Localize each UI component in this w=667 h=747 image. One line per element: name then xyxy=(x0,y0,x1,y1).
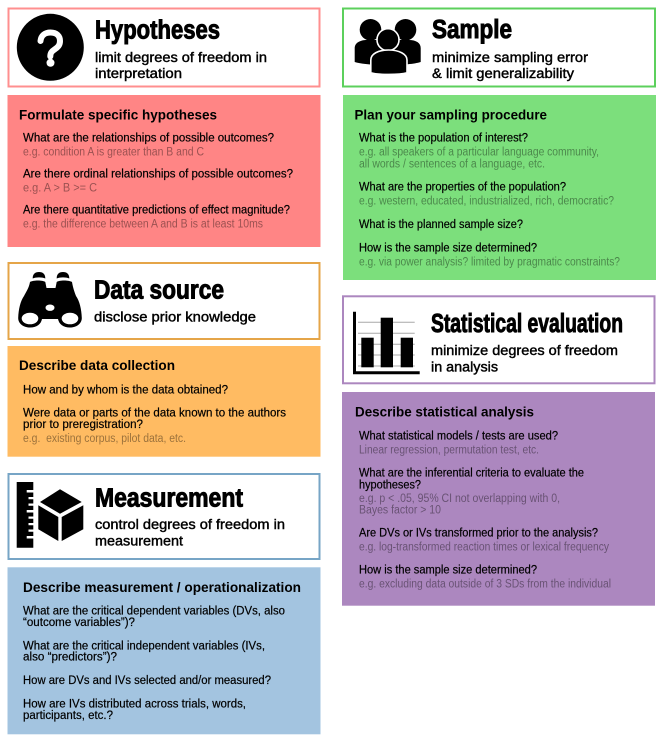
section: Measurement xyxy=(8,474,320,734)
heading: Hypotheses: Hypotheses xyxy=(95,16,220,44)
icon: question mark xyxy=(17,14,84,81)
item: relationships of outcomes: What are the relationships of possible outcomes? xyxy=(23,133,274,145)
subheading xyxy=(432,50,589,81)
section: Sample xyxy=(343,8,656,280)
heading: Data source: Data source xyxy=(94,276,224,304)
section: Hypotheses xyxy=(8,8,320,247)
item: inferential criteria: Bayes factor > 10 xyxy=(359,505,441,517)
item: dependent variables: “outcome variables”)? xyxy=(23,617,135,629)
item: properties of population: e.g. western, educated, industrialized, rich, democratic? xyxy=(359,196,614,208)
subheading xyxy=(431,343,618,375)
item: inferential criteria: hypotheses? xyxy=(359,479,421,491)
item: properties of population xyxy=(359,182,614,208)
item: distribution of IVs xyxy=(23,698,246,722)
header box: Sample xyxy=(343,8,655,86)
item: ordinal relationships: e.g. A > B >= C xyxy=(23,183,97,195)
item: population of interest: What is the population of interest? xyxy=(359,133,528,145)
panel heading: Describe measurement / operationalization xyxy=(23,579,301,595)
subheading: control degrees of freedom in xyxy=(95,517,285,532)
panel: Plan your sampling procedure xyxy=(343,95,656,280)
heading: Measurement: Measurement xyxy=(95,485,243,513)
item: planned sample size: What is the planned sample size? xyxy=(359,219,523,231)
item: distribution of IVs: How are IVs distributed across trials, words, xyxy=(23,698,246,710)
header box: Data source xyxy=(8,263,320,339)
item: known prior to preregistration: Were data or parts of the data known to the authors xyxy=(23,408,286,420)
item: inferential criteria xyxy=(359,468,584,517)
item: sample size determination xyxy=(359,243,620,269)
item: exclusions xyxy=(359,564,611,591)
section: Statistical evaluation xyxy=(342,296,655,606)
panel: Describe statistical analysis xyxy=(342,392,655,606)
panel: Describe data collection xyxy=(8,346,320,457)
subheading: in analysis xyxy=(431,360,498,375)
item: inferential criteria: e.g. p < .05, 95% CI not overlapping with 0, xyxy=(359,493,560,505)
item: transformations xyxy=(359,528,609,554)
item: population of interest xyxy=(359,133,599,170)
item: how and by whom: How and by whom is the data obtained? xyxy=(23,384,228,396)
subheading: minimize sampling error xyxy=(432,50,589,65)
panel heading: Plan your sampling procedure xyxy=(354,106,547,122)
item: exclusions: How is the sample size determined? xyxy=(359,564,537,576)
item: ordinal relationships xyxy=(23,169,293,195)
panel: Formulate specific hypotheses xyxy=(8,95,320,247)
heading: Sample: Sample xyxy=(432,16,512,44)
subheading: interpretation xyxy=(95,66,182,81)
panel heading: Describe statistical analysis xyxy=(355,404,534,420)
item: sample size determination: e.g. via power analysis? limited by pragmatic constraints? xyxy=(359,257,620,269)
icon: ruler and cube xyxy=(17,482,83,548)
item: population of interest: all words / sentences of a language, etc. xyxy=(359,158,545,170)
item: relationships of outcomes xyxy=(23,133,274,159)
item: dependent variables xyxy=(23,606,285,629)
item: models and tests: Linear regression, permutation test, etc. xyxy=(359,444,539,456)
item: quantitative predictions: Are there quantitative predictions of effect magnitude? xyxy=(23,205,290,217)
item: selection and measurement: How are DVs and IVs selected and/or measured? xyxy=(23,675,271,687)
subheading: disclose prior knowledge xyxy=(94,309,256,324)
subheading: & limit generalizability xyxy=(432,66,574,81)
subheading xyxy=(95,50,267,81)
panel heading: Formulate specific hypotheses xyxy=(19,106,217,122)
item: dependent variables: What are the critical dependent variables (DVs, also xyxy=(23,606,285,618)
item: independent variables: What are the critical independent variables (IVs, xyxy=(23,640,265,652)
panel heading: Describe data collection xyxy=(19,357,175,373)
item: quantitative predictions xyxy=(23,205,290,231)
header box: Hypotheses xyxy=(8,8,320,86)
item: inferential criteria: What are the inferential criteria to evaluate the xyxy=(359,468,584,480)
subheading: measurement xyxy=(95,534,183,549)
item: exclusions: e.g. excluding data outside of 3 SDs from the individual xyxy=(359,579,611,591)
icon: group of people xyxy=(355,19,421,74)
item: transformations: Are DVs or IVs transformed prior to the analysis? xyxy=(359,528,598,540)
panel: Describe measurement / operationalization xyxy=(8,567,320,734)
item: known prior to preregistration: e.g. existing corpus, pilot data, etc. xyxy=(23,433,186,445)
header box: Measurement xyxy=(8,474,320,559)
item: sample size determination: How is the sample size determined? xyxy=(359,243,537,255)
item: properties of population: What are the properties of the population? xyxy=(359,182,566,194)
icon: binoculars xyxy=(18,272,82,328)
item: independent variables: also “predictors”)? xyxy=(23,652,117,664)
item: distribution of IVs: participants, etc.? xyxy=(23,710,113,722)
item: population of interest: e.g. all speakers of a particular language community, xyxy=(359,147,599,159)
item: transformations: e.g. log-transformed reaction times or lexical frequency xyxy=(359,542,609,554)
item: quantitative predictions: e.g. the difference between A and B is at least 10ms xyxy=(23,219,263,231)
subheading xyxy=(95,517,285,549)
item: models and tests: What statistical models / tests are used? xyxy=(359,430,558,442)
item: known prior to preregistration: prior to preregistration? xyxy=(23,419,143,431)
item: independent variables xyxy=(23,640,265,664)
item: models and tests xyxy=(359,430,558,456)
section: Data source xyxy=(8,263,320,457)
header box: Statistical evaluation xyxy=(343,296,654,383)
item: relationships of outcomes: e.g. condition A is greater than B and C xyxy=(23,147,204,159)
subheading: limit degrees of freedom in xyxy=(95,50,267,65)
subheading: minimize degrees of freedom xyxy=(431,343,618,358)
item: ordinal relationships: Are there ordinal relationships of possible outcomes? xyxy=(23,169,293,181)
item: known prior to preregistration xyxy=(23,408,286,445)
icon: bar chart xyxy=(353,312,420,374)
